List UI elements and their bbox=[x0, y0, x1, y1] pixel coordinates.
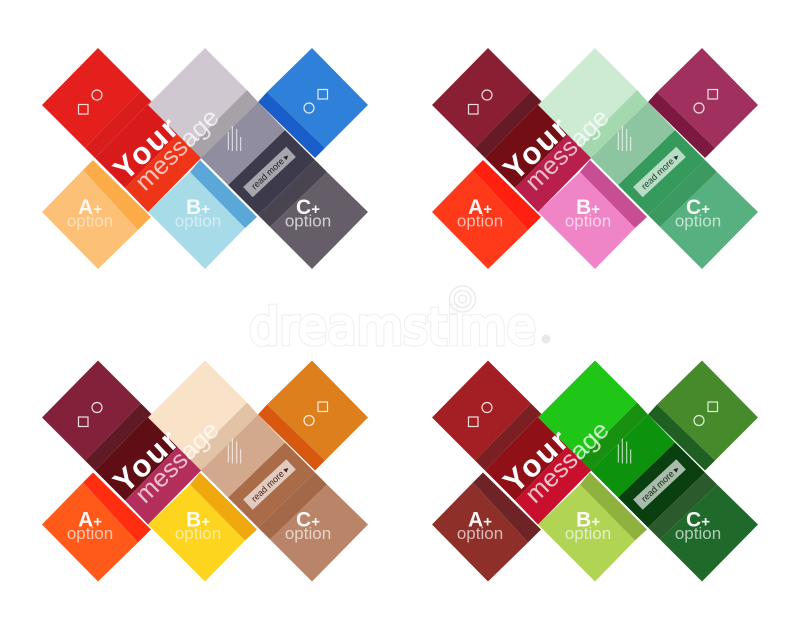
option B tile bbox=[148, 472, 257, 582]
option C band bbox=[618, 442, 758, 582]
title: message: message bbox=[520, 416, 615, 509]
title: Your: Your bbox=[106, 423, 185, 500]
band: your message bbox=[42, 48, 204, 212]
title: Your: Your bbox=[106, 110, 185, 187]
icon: vertical lines bbox=[228, 126, 241, 151]
option B tile bbox=[538, 472, 647, 582]
read more button: read more ▸ bbox=[639, 463, 682, 504]
icon: vertical lines bbox=[228, 438, 241, 464]
read more button bbox=[243, 459, 296, 510]
option A tile bbox=[432, 472, 541, 582]
label: A+ option: A+ bbox=[468, 508, 492, 532]
label: C+ option bbox=[285, 196, 331, 230]
option C band bbox=[618, 130, 758, 269]
label: C+ option: option bbox=[675, 212, 721, 230]
label: A+ option bbox=[457, 196, 503, 230]
top-right tile bbox=[258, 360, 368, 470]
label: C+ option bbox=[675, 196, 721, 230]
label: C+ option: option bbox=[285, 212, 331, 230]
label: A+ option: option bbox=[457, 524, 503, 543]
label: C+ option: C+ bbox=[296, 196, 320, 219]
option B tile bbox=[148, 160, 257, 269]
label: B+ option bbox=[565, 196, 611, 230]
top-right tile bbox=[648, 360, 758, 470]
label: A+ option bbox=[67, 508, 113, 543]
option A tile bbox=[42, 472, 151, 582]
icon: square and circle left bbox=[78, 402, 102, 426]
label: B+ option: B+ bbox=[186, 508, 210, 532]
watermark: dreamstime: dreamstime bbox=[249, 298, 536, 356]
icon: vertical lines bbox=[618, 126, 631, 151]
panel: bottom-right infographic bbox=[432, 360, 758, 582]
title: message: message bbox=[520, 103, 615, 196]
watermark: dreamstime: dreamstime bbox=[249, 298, 536, 356]
label: B+ option bbox=[175, 508, 221, 543]
read more button bbox=[633, 459, 686, 510]
title: message: message bbox=[130, 416, 225, 509]
panel: top-left infographic bbox=[42, 48, 368, 269]
label: A+ option: option bbox=[67, 524, 113, 543]
title: Your: Your bbox=[496, 423, 575, 500]
label: B+ option bbox=[175, 196, 221, 230]
top-right tile bbox=[648, 48, 758, 158]
center band bbox=[538, 360, 675, 498]
band: your message bbox=[42, 360, 204, 524]
icon: square and circle left bbox=[468, 402, 492, 426]
option A tile bbox=[42, 160, 151, 269]
read more button bbox=[243, 147, 296, 197]
title: Your: Your bbox=[496, 110, 575, 187]
icon: circle and square right bbox=[694, 90, 718, 113]
read more button: read more ▸ bbox=[249, 151, 292, 191]
label: A+ option: option bbox=[67, 212, 113, 230]
label: B+ option: option bbox=[565, 524, 611, 543]
label: C+ option: C+ bbox=[296, 508, 320, 532]
label: A+ option bbox=[67, 196, 113, 230]
icon: square and circle left bbox=[468, 90, 492, 114]
icon: circle and square right bbox=[694, 402, 718, 426]
band: your message bbox=[432, 48, 594, 212]
icon: vertical lines bbox=[618, 438, 631, 464]
read more button: read more ▸ bbox=[639, 151, 682, 191]
panel: bottom-left infographic bbox=[42, 360, 368, 582]
label: A+ option: option bbox=[457, 212, 503, 230]
band: your message bbox=[432, 360, 594, 524]
center band bbox=[148, 48, 285, 185]
option C band bbox=[228, 442, 368, 582]
label: B+ option: B+ bbox=[186, 196, 210, 219]
label: C+ option bbox=[285, 508, 331, 543]
label: B+ option: B+ bbox=[576, 196, 600, 219]
label: C+ option: C+ bbox=[686, 196, 710, 219]
top-right tile bbox=[258, 48, 368, 158]
read more button: read more ▸ bbox=[249, 463, 292, 504]
icon: circle and square right bbox=[304, 90, 328, 113]
label: A+ option bbox=[457, 508, 503, 543]
label: A+ option: A+ bbox=[468, 196, 492, 219]
panel: top-right infographic bbox=[432, 48, 758, 269]
label: A+ option: A+ bbox=[78, 508, 102, 532]
label: A+ option: A+ bbox=[78, 196, 102, 219]
title: message: message bbox=[130, 103, 225, 196]
label: B+ option: option bbox=[175, 212, 221, 230]
label: B+ option bbox=[565, 508, 611, 543]
label: B+ option: option bbox=[175, 524, 221, 543]
icon: circle and square right bbox=[304, 402, 328, 426]
label: C+ option: option bbox=[285, 524, 331, 543]
label: C+ option: option bbox=[675, 524, 721, 543]
center band bbox=[538, 48, 675, 185]
label: B+ option: option bbox=[565, 212, 611, 230]
label: C+ option: C+ bbox=[686, 508, 710, 532]
label: B+ option: B+ bbox=[576, 508, 600, 532]
option B tile bbox=[538, 160, 647, 269]
option A tile bbox=[432, 160, 541, 269]
option C band bbox=[228, 130, 368, 269]
icon: square and circle left bbox=[78, 90, 102, 114]
label: C+ option bbox=[675, 508, 721, 543]
center band bbox=[148, 360, 285, 498]
read more button bbox=[633, 147, 686, 197]
